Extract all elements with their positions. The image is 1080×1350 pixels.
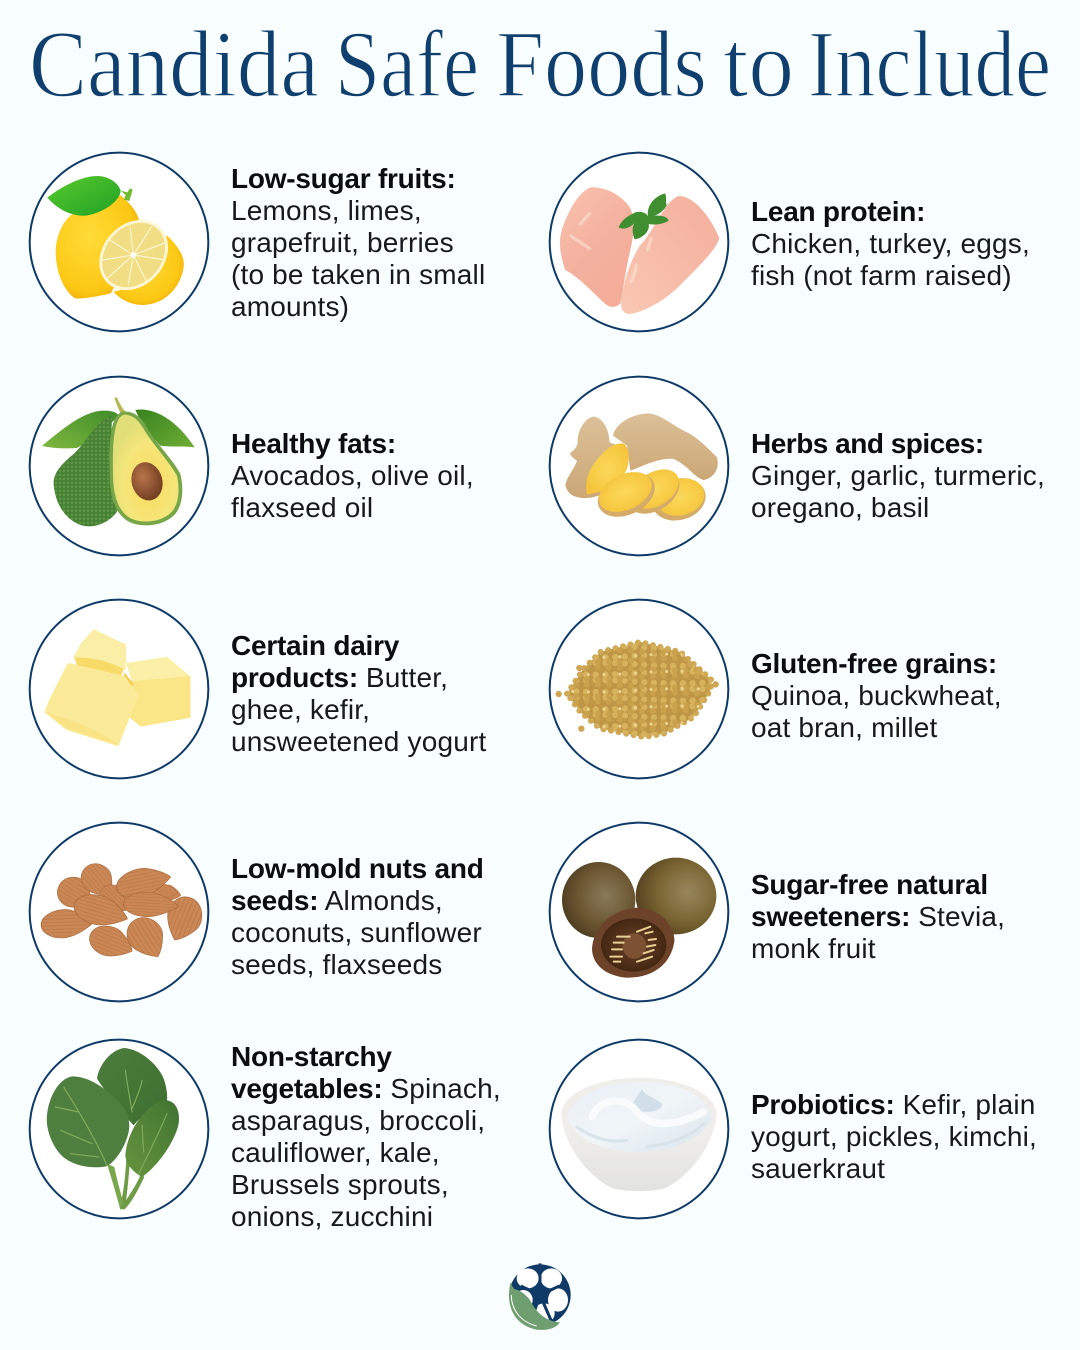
- text: probiotics: Probiotics: Kefir, plain: [751, 1089, 1035, 1120]
- text: healthy fats: flaxseed oil: [231, 492, 373, 523]
- text: non-starchy vegetables: Brussels sprouts,: [231, 1169, 449, 1200]
- text: certain dairy products: ghee, kefir,: [231, 694, 370, 725]
- text: certain dairy products: unsweetened yogurt: [231, 726, 486, 757]
- text: low-sugar fruits: Lemons, limes,: [231, 195, 422, 226]
- text: low-mold nuts and seeds: seeds: Almonds,: [231, 885, 443, 916]
- text: herbs and spices: Ginger, garlic, turmeric,: [751, 460, 1045, 491]
- text: non-starchy vegetables: [231, 1041, 501, 1232]
- icon: butter cubes: [28, 598, 210, 780]
- icon: logo: [509, 1263, 571, 1330]
- text: lean protein: fish (not farm raised): [751, 260, 1012, 291]
- text: sugar-free natural sweeteners: [751, 869, 1005, 964]
- text: non-starchy vegetables: Non-starchy: [231, 1041, 392, 1072]
- text: certain dairy products: [231, 630, 486, 757]
- text: herbs and spices: oregano, basil: [751, 492, 929, 523]
- text: gluten-free grains: Quinoa, buckwheat,: [751, 680, 1002, 711]
- icon: lemons: [28, 152, 210, 332]
- text: non-starchy vegetables: asparagus, broccoli,: [231, 1105, 485, 1136]
- text: herbs and spices: Herbs and spices:: [751, 428, 984, 459]
- title: Foods: [496, 11, 707, 117]
- text: non-starchy vegetables: vegetables: Spinach,: [231, 1073, 501, 1104]
- icon: avocado: [28, 376, 210, 556]
- icon: spinach: [28, 1038, 210, 1220]
- title: Safe: [335, 11, 479, 117]
- text: low-sugar fruits: amounts): [231, 291, 349, 322]
- text: non-starchy vegetables: cauliflower, kale,: [231, 1137, 440, 1168]
- text: low-mold nuts and seeds: coconuts, sunflower: [231, 917, 482, 948]
- text: low-mold nuts and seeds: seeds, flaxseeds: [231, 949, 442, 980]
- icon: ginger: [548, 376, 730, 556]
- text: certain dairy products: Certain dairy: [231, 630, 399, 661]
- icon: chicken breasts: [548, 152, 730, 332]
- icon: yogurt bowl: [548, 1038, 730, 1220]
- title: to: [723, 11, 794, 117]
- text: low-sugar fruits: Low-sugar fruits:: [231, 163, 456, 194]
- text: probiotics: [751, 1089, 1037, 1184]
- text: healthy fats: Avocados, olive oil,: [231, 460, 474, 491]
- text: lean protein: Chicken, turkey, eggs,: [751, 228, 1030, 259]
- text: non-starchy vegetables: onions, zucchini: [231, 1201, 433, 1232]
- text: herbs and spices: [751, 428, 1045, 523]
- text: gluten-free grains: Gluten-free grains:: [751, 648, 997, 679]
- text: probiotics: sauerkraut: [751, 1153, 885, 1184]
- text: certain dairy products: products: Butter,: [231, 662, 448, 693]
- text: lean protein: [751, 196, 1030, 291]
- text: low-sugar fruits: [231, 163, 485, 322]
- text: healthy fats: [231, 428, 474, 523]
- text: probiotics: yogurt, pickles, kimchi,: [751, 1121, 1037, 1152]
- text: sugar-free natural sweeteners: monk fruit: [751, 933, 876, 964]
- title: Candida: [29, 11, 319, 117]
- text: gluten-free grains: oat bran, millet: [751, 712, 938, 743]
- text: gluten-free grains: [751, 648, 1002, 743]
- text: lean protein: Lean protein:: [751, 196, 925, 227]
- text: sugar-free natural sweeteners: sweeteners: Stevia,: [751, 901, 1005, 932]
- text: low-mold nuts and seeds: [231, 853, 484, 980]
- text: healthy fats: Healthy fats:: [231, 428, 396, 459]
- title: [29, 11, 1051, 117]
- text: low-sugar fruits: (to be taken in small: [231, 259, 485, 290]
- icon: almonds: [28, 822, 210, 1002]
- text: sugar-free natural sweeteners: Sugar-free natural: [751, 869, 988, 900]
- text: low-mold nuts and seeds: Low-mold nuts and: [231, 853, 484, 884]
- icon: buckwheat grains: [548, 598, 730, 780]
- icon: monk fruit: [548, 822, 730, 1002]
- text: low-sugar fruits: grapefruit, berries: [231, 227, 454, 258]
